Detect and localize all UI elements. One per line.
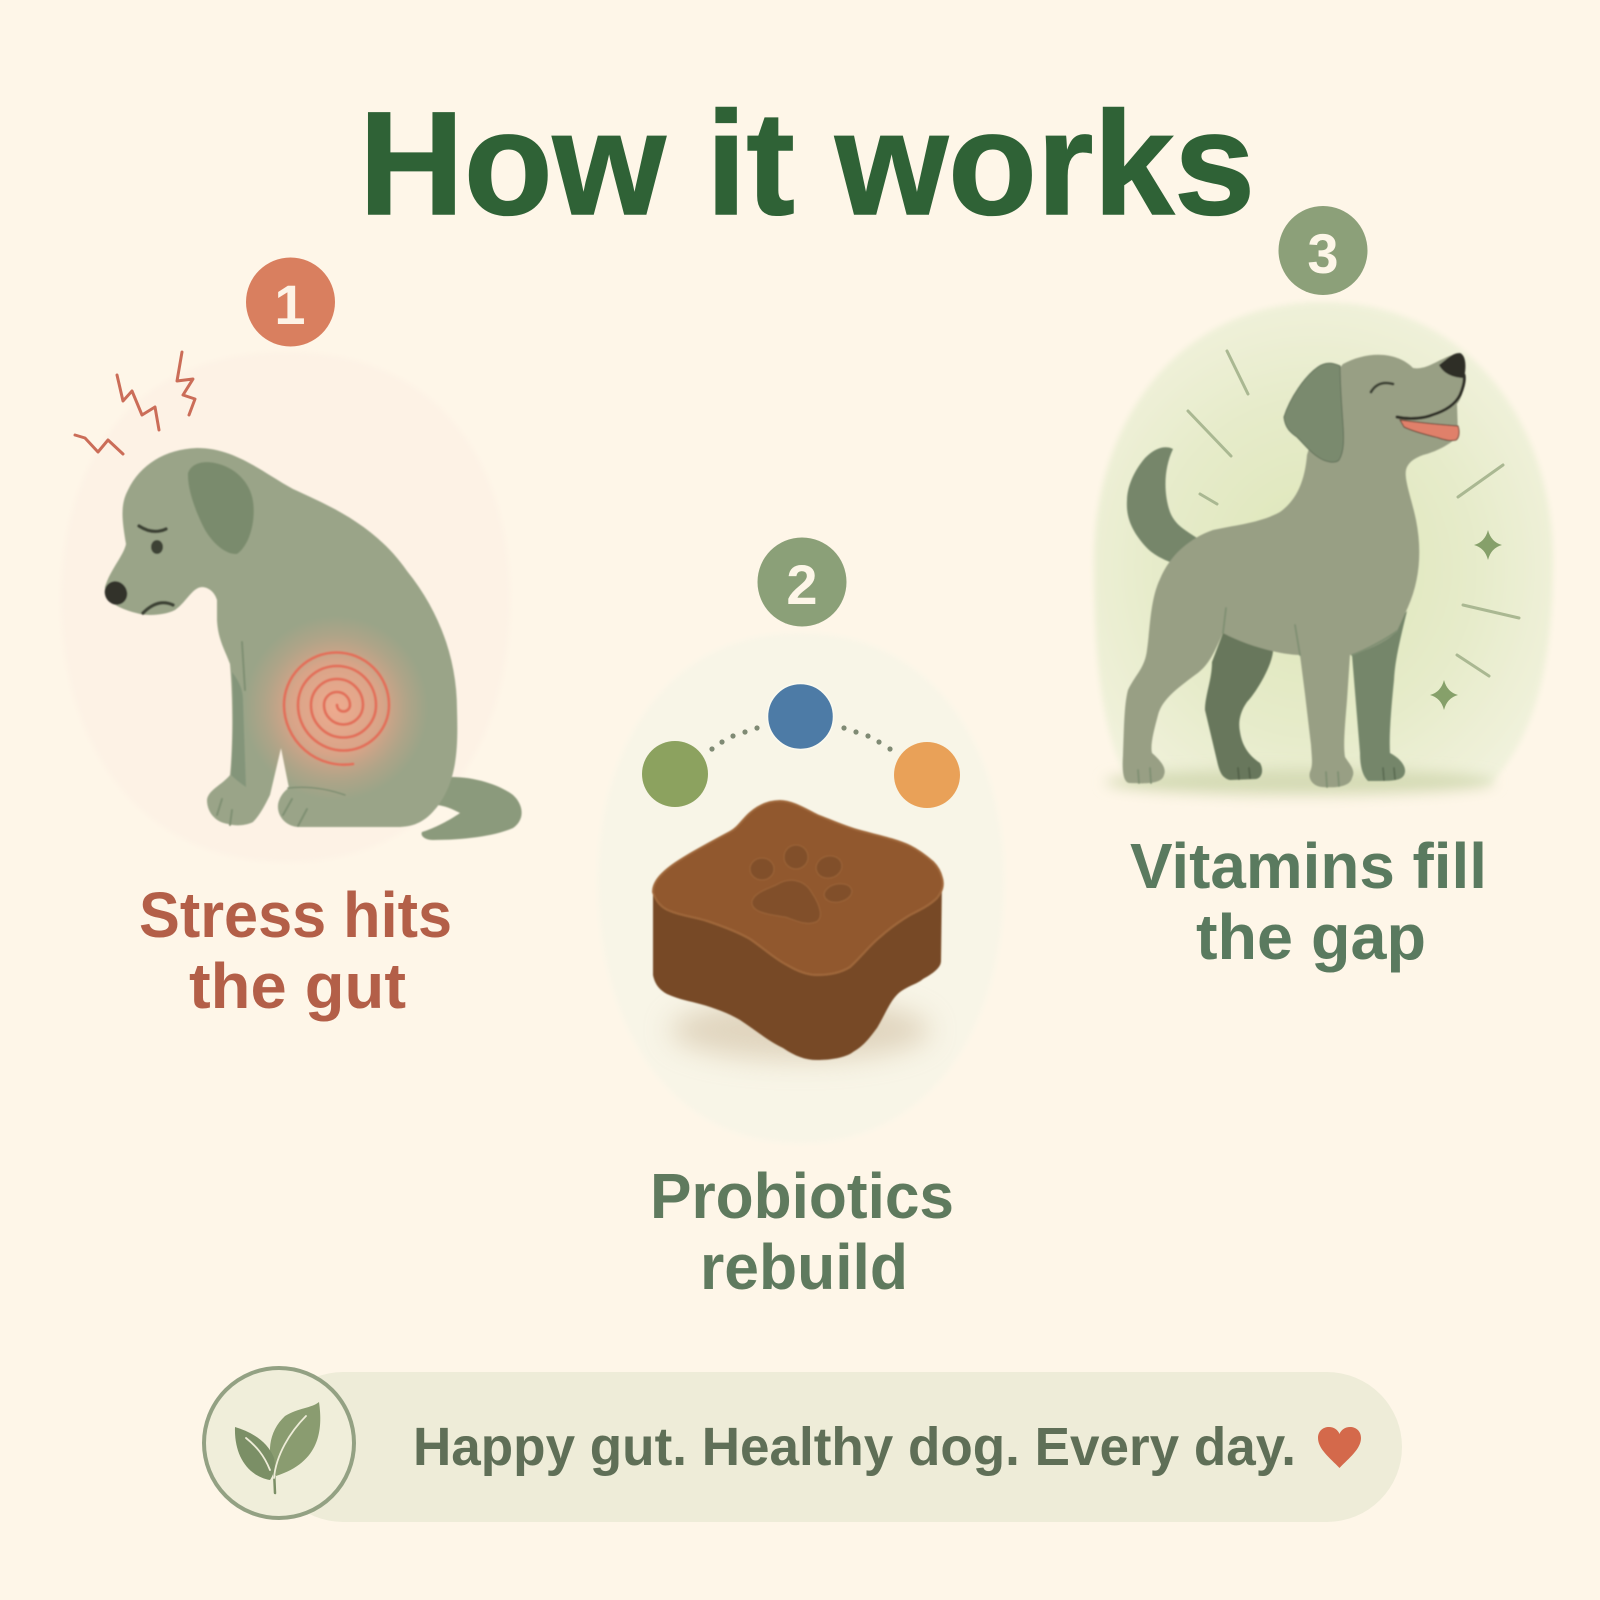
chew side — [653, 878, 942, 1060]
dog leg and toe lines — [217, 642, 345, 826]
label: stress hits the gut: Stress hits — [139, 879, 452, 951]
label: vitamins fill the gap: Vitamins fill — [1130, 830, 1487, 902]
label: stress hits the gut: the gut — [189, 950, 406, 1022]
chew paw print — [750, 845, 854, 923]
badge: number 1: 1 — [274, 273, 306, 336]
dog far front leg — [1352, 611, 1407, 781]
radiating joy lines — [1188, 351, 1519, 676]
background blob: step 2 — [598, 633, 1004, 1143]
badge: number 3: 3 — [1307, 222, 1339, 285]
badge: number 1 — [246, 258, 335, 346]
dog frown — [143, 603, 173, 613]
label: probiotics rebuild: Probiotics — [650, 1160, 954, 1232]
dog back leg — [1205, 633, 1273, 780]
icon: green probiotic dot — [642, 741, 708, 807]
illustration: probiotic chew — [653, 801, 943, 1060]
tummy spiral — [284, 652, 389, 765]
dog sad eye and brow — [139, 526, 166, 554]
dog tail — [1127, 447, 1197, 562]
icon: leaf badge — [204, 1368, 354, 1518]
footer banner — [204, 1368, 1402, 1522]
banner text: Happy gut. Healthy dog. Every day. — [413, 1417, 1296, 1477]
chew top — [653, 801, 943, 975]
icon: sparkle upper — [1474, 530, 1502, 560]
dog body — [105, 448, 457, 827]
banner pill — [268, 1372, 1402, 1522]
badge: number 2 — [758, 538, 846, 626]
label: vitamins fill the gap: the gap — [1196, 901, 1426, 973]
tummy pain glow — [252, 624, 420, 792]
background blob: step 1 — [61, 352, 510, 862]
panel: step 3 vitamins fill the gap — [1094, 206, 1553, 973]
dog ear — [188, 462, 254, 554]
icon: sparkle lower — [1430, 680, 1458, 710]
front leg shade — [231, 672, 246, 787]
icon: orange probiotic dot — [894, 742, 960, 808]
dog body — [1123, 355, 1465, 787]
background blob: step 3 — [1094, 302, 1553, 785]
ground shadow — [1105, 769, 1495, 795]
dog tail — [422, 777, 522, 840]
dog tongue — [1400, 420, 1459, 441]
illustration: sad sitting dog — [100, 448, 522, 840]
panel: step 2 probiotics rebuild — [598, 538, 1004, 1303]
illustration: happy standing dog — [1123, 353, 1465, 787]
dog happy eye — [1371, 383, 1393, 392]
dog smile line — [1397, 375, 1464, 418]
title: How it works — [359, 82, 1255, 246]
panel: step 1 stress hits the gut — [61, 258, 522, 1022]
dog nose — [100, 577, 132, 609]
dog ear — [1284, 363, 1344, 462]
icon: stress zigzags — [75, 352, 195, 454]
dog nose — [1439, 353, 1465, 378]
badge: number 2: 2 — [786, 553, 818, 616]
label: probiotics rebuild: rebuild — [700, 1231, 908, 1303]
badge: number 3 — [1278, 206, 1368, 295]
dog toe and chest lines — [1138, 608, 1397, 787]
icon: heart — [1318, 1427, 1361, 1468]
icon: blue probiotic dot — [768, 684, 834, 750]
chew shadow — [670, 1000, 930, 1060]
dotted connectors — [709, 725, 893, 752]
